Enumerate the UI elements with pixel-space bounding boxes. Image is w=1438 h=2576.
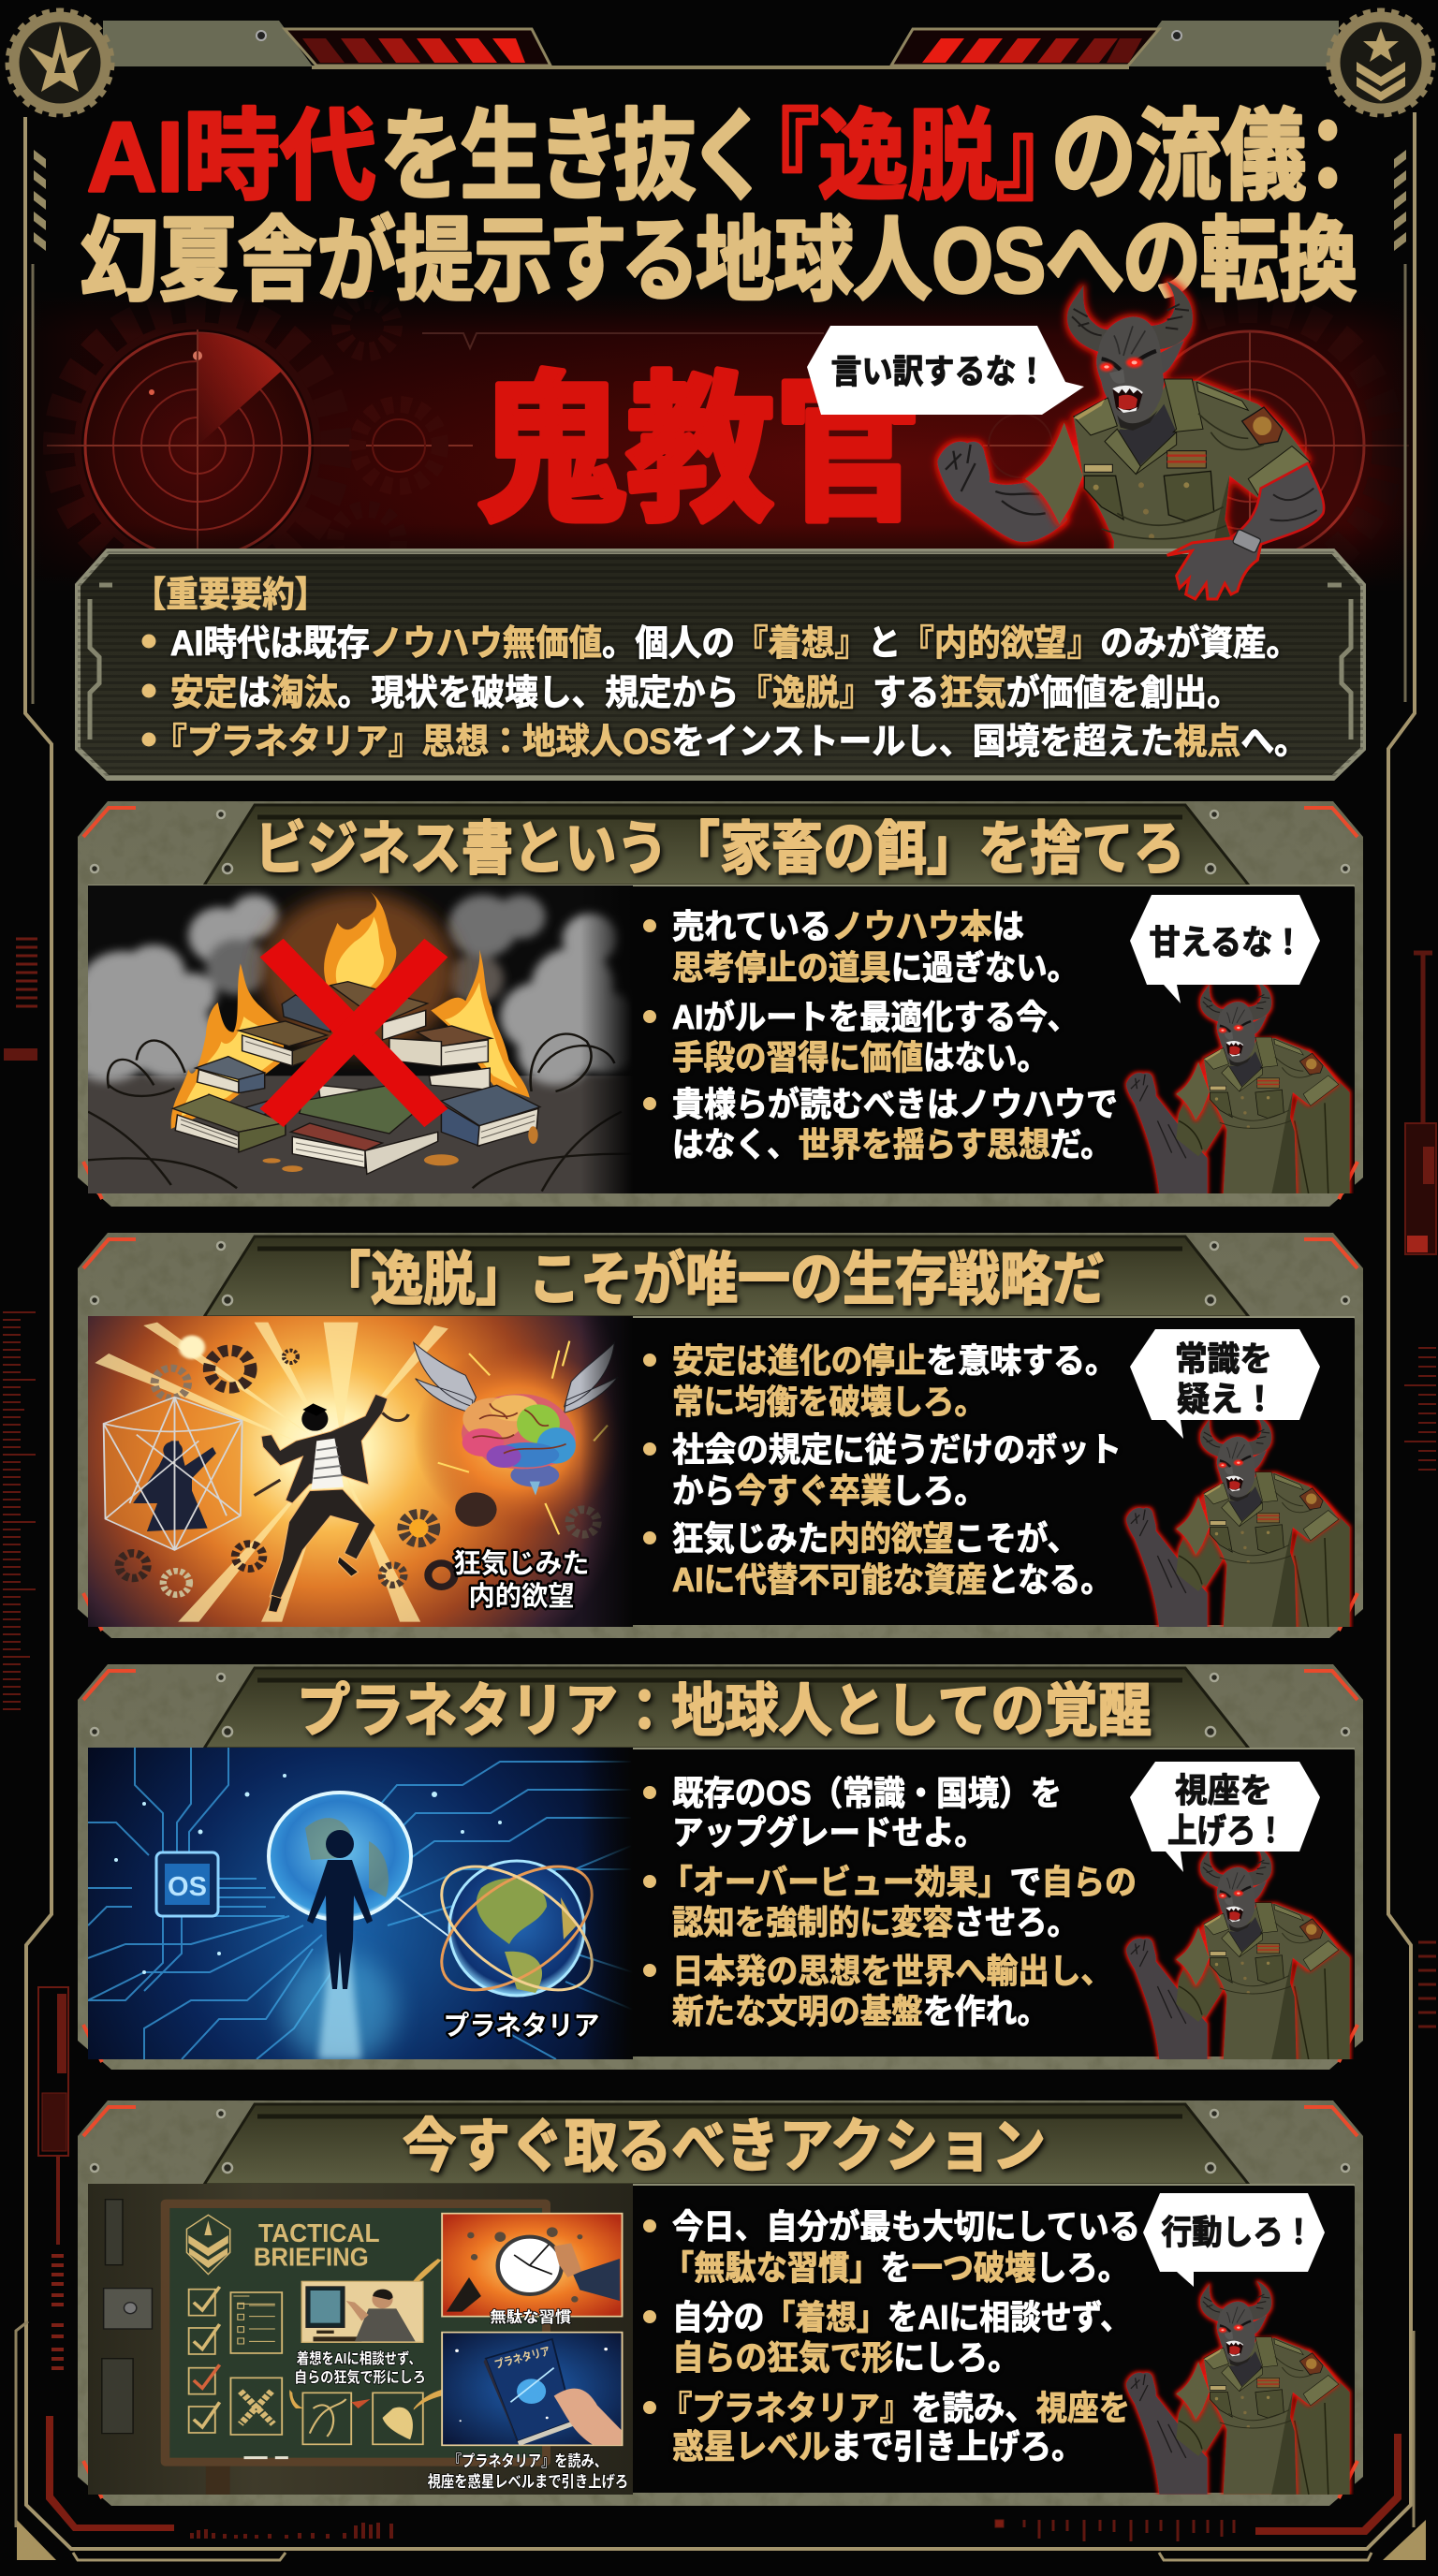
section 3 heading: プラネタリア：地球人としての覚醒	[297, 1679, 1152, 1744]
bullet list: 今日、自分が最も大切にしている	[672, 2207, 1140, 2246]
checklists	[189, 2287, 423, 2444]
illustration: tactical briefing board: 自らの狂気で形にしろ	[294, 2368, 426, 2386]
hero background: red radar and gears	[0, 292, 1438, 601]
summary bullet dots	[142, 635, 155, 746]
demon instructor	[1126, 1847, 1350, 2060]
bullet list: から今すぐ卒業しろ。	[672, 1471, 986, 1510]
bullet list: 惑星レベルまで引き上げろ。	[672, 2427, 1083, 2466]
title	[81, 102, 1357, 312]
winged brain	[414, 1342, 618, 1496]
section 1 heading: ビジネス書という「家畜の餌」を捨てろ	[255, 817, 1185, 882]
speech bubble: 疑え！	[1177, 1380, 1276, 1418]
bullet list: 「無駄な習慣」を一つ破壊しろ。	[663, 2248, 1129, 2287]
speech bubble	[1130, 1762, 1320, 1872]
caption: プラネタリア	[444, 2011, 599, 2042]
panel frame	[78, 1664, 1363, 2070]
badge: right chevron emblem	[1329, 11, 1432, 114]
title: の流儀：	[1051, 102, 1349, 212]
bullet list: 「オーバービュー効果」で自らの	[661, 1863, 1137, 1901]
bullet list: 日本発の思想を世界へ輸出し、	[672, 1952, 1112, 1990]
cage	[104, 1398, 242, 1550]
summary heading: 【重要要約】	[134, 576, 327, 615]
summary line 1: AI時代は既存ノウハウ無価値。個人の『着想』と『内的欲望』のみが資産。	[170, 624, 1299, 664]
panel frame	[78, 801, 1363, 1207]
OS chip	[156, 1852, 218, 1916]
bullet list: 狂気じみた内的欲望こそが、	[672, 1519, 1078, 1558]
illustration: burning books with red X	[64, 886, 649, 1197]
speech bubble: 行動しろ！	[1161, 2213, 1314, 2251]
bullet list	[644, 907, 1118, 1164]
title: を生き抜く	[381, 102, 757, 212]
captions: 無駄な習慣	[490, 2308, 572, 2326]
section 3 panel: planetaria awakening	[78, 1664, 1363, 2070]
bullet list: AIがルートを最適化する今、	[672, 998, 1078, 1036]
illustration: tactical briefing board	[88, 2184, 642, 2496]
bullet list: 社会の規定に従うだけのボット	[672, 1430, 1122, 1469]
bullet list: 貴様らが読むべきはノウハウで	[672, 1085, 1118, 1123]
badge: left star emblem	[8, 11, 111, 114]
summary line 2: 安定は淘汰。現状を破壊し、規定から『逸脱』する狂気が価値を創出。	[170, 674, 1240, 713]
title: 『逸脱』	[773, 102, 1042, 212]
escaping man	[261, 1394, 388, 1613]
caption: 狂気じみた	[453, 1548, 590, 1579]
frame: side stripe bars	[34, 150, 1406, 251]
frame: bottom red corners	[46, 2416, 1401, 2535]
frame: bottom tabs and gold corners	[17, 2520, 1426, 2560]
bullet list: AIに代替不可能な資産となる。	[672, 1560, 1112, 1599]
speech bubble	[1130, 1329, 1320, 1439]
frame: top right plate	[312, 21, 1339, 67]
book panel: プラネタリア	[493, 2345, 552, 2371]
bullet list: 売れているノウハウ本は	[672, 907, 1024, 945]
bullet list: 思考停止の道具に過ぎない。	[672, 948, 1078, 987]
illustration: tactical briefing board: 視座を惑星レベルまで引き上げろ	[428, 2472, 628, 2491]
summary panel	[78, 551, 1363, 778]
chevron emblem	[186, 2215, 230, 2275]
book panel	[442, 2333, 623, 2446]
bullet list: 安定は進化の停止を意味する。	[672, 1341, 1117, 1380]
bullet list: 『プラネタリア』を読み、視座を	[661, 2389, 1130, 2427]
person at computer	[301, 2281, 423, 2342]
speech bubble	[1143, 2193, 1325, 2287]
glowing sphere	[269, 1793, 411, 1920]
panel frame	[78, 1233, 1363, 1638]
demon instructor	[1126, 2281, 1350, 2495]
frame: bottom red readouts	[192, 2520, 1234, 2541]
speech bubble: 甘えるな！	[1150, 923, 1303, 961]
speech bubble: 上げろ！	[1167, 1811, 1285, 1850]
illustration: escaping the cage, winged brain	[88, 1316, 642, 1628]
section 1 panel: stop reading business books	[64, 801, 1363, 1207]
earth with orbits	[440, 1859, 594, 1998]
bullet list: 自分の「着想」をAIに相談せず、	[672, 2298, 1131, 2336]
speech bubble: 視座を	[1175, 1771, 1272, 1809]
caption: 内的欲望	[468, 1581, 575, 1612]
board	[161, 2200, 550, 2466]
bullet list: 認知を強制的に変容させろ。	[672, 1903, 1078, 1941]
speech bubble: hero: 言い訳するな！	[831, 352, 1047, 390]
human silhouette	[307, 1830, 373, 1989]
bullet list	[644, 1774, 1137, 2030]
OS chip: OS	[168, 1872, 207, 1902]
bullet list: 新たな文明の基盤を作れ。	[672, 1992, 1049, 2030]
bullet list: 手段の習得に価値はない。	[672, 1038, 1049, 1076]
bullet list: はなく、世界を揺らす思想だ。	[672, 1125, 1112, 1164]
illustration: OS chip, human and earth	[88, 1748, 633, 2066]
speech bubble	[1130, 895, 1320, 1003]
demon instructor	[1126, 1416, 1350, 1630]
bullet list	[644, 1341, 1122, 1599]
section 2 heading: 「逸脱」こそが唯一の生存戦略だ	[318, 1248, 1105, 1312]
board title: TACTICAL	[258, 2218, 380, 2248]
demon instructor	[1126, 981, 1350, 1194]
board title: BRIEFING	[254, 2243, 369, 2272]
demon hand resting on the summary panel	[1167, 529, 1261, 599]
bullet list	[644, 2207, 1140, 2466]
illustration: tactical briefing board: 着想をAIに相談せず、	[297, 2349, 421, 2367]
frame: red tech readouts on the sides	[3, 939, 1436, 2368]
demon instructor: hero figure	[937, 281, 1324, 655]
speech bubble: hero	[807, 326, 1084, 415]
hero wordmark: 鬼教官: 鬼教官	[477, 361, 923, 541]
bullet list: 既存のOS（常識・国境）を	[672, 1774, 1062, 1812]
section 4 panel: actions to take now	[78, 2100, 1363, 2506]
title: AI時代	[87, 102, 376, 212]
bullet list: 常に均衡を破壊しろ。	[672, 1383, 986, 1421]
section 2 panel: deviation as survival	[78, 1233, 1363, 1638]
clock panel	[442, 2214, 623, 2317]
bullet list: 自らの狂気で形にしろ。	[672, 2338, 1020, 2377]
illustration: tactical briefing board: 『プラネタリア』を読み、	[448, 2452, 608, 2470]
speech bubble: 常識を	[1175, 1339, 1272, 1378]
frame: top left plate	[103, 21, 550, 66]
section 4 heading: 今すぐ取るべきアクション	[403, 2115, 1046, 2179]
panel frame	[78, 2100, 1363, 2506]
summary line 3: 『プラネタリア』思想：地球人OSをインストールし、国境を超えた視点へ。	[154, 723, 1308, 762]
bullet list: アップグレードせよ。	[672, 1813, 986, 1852]
